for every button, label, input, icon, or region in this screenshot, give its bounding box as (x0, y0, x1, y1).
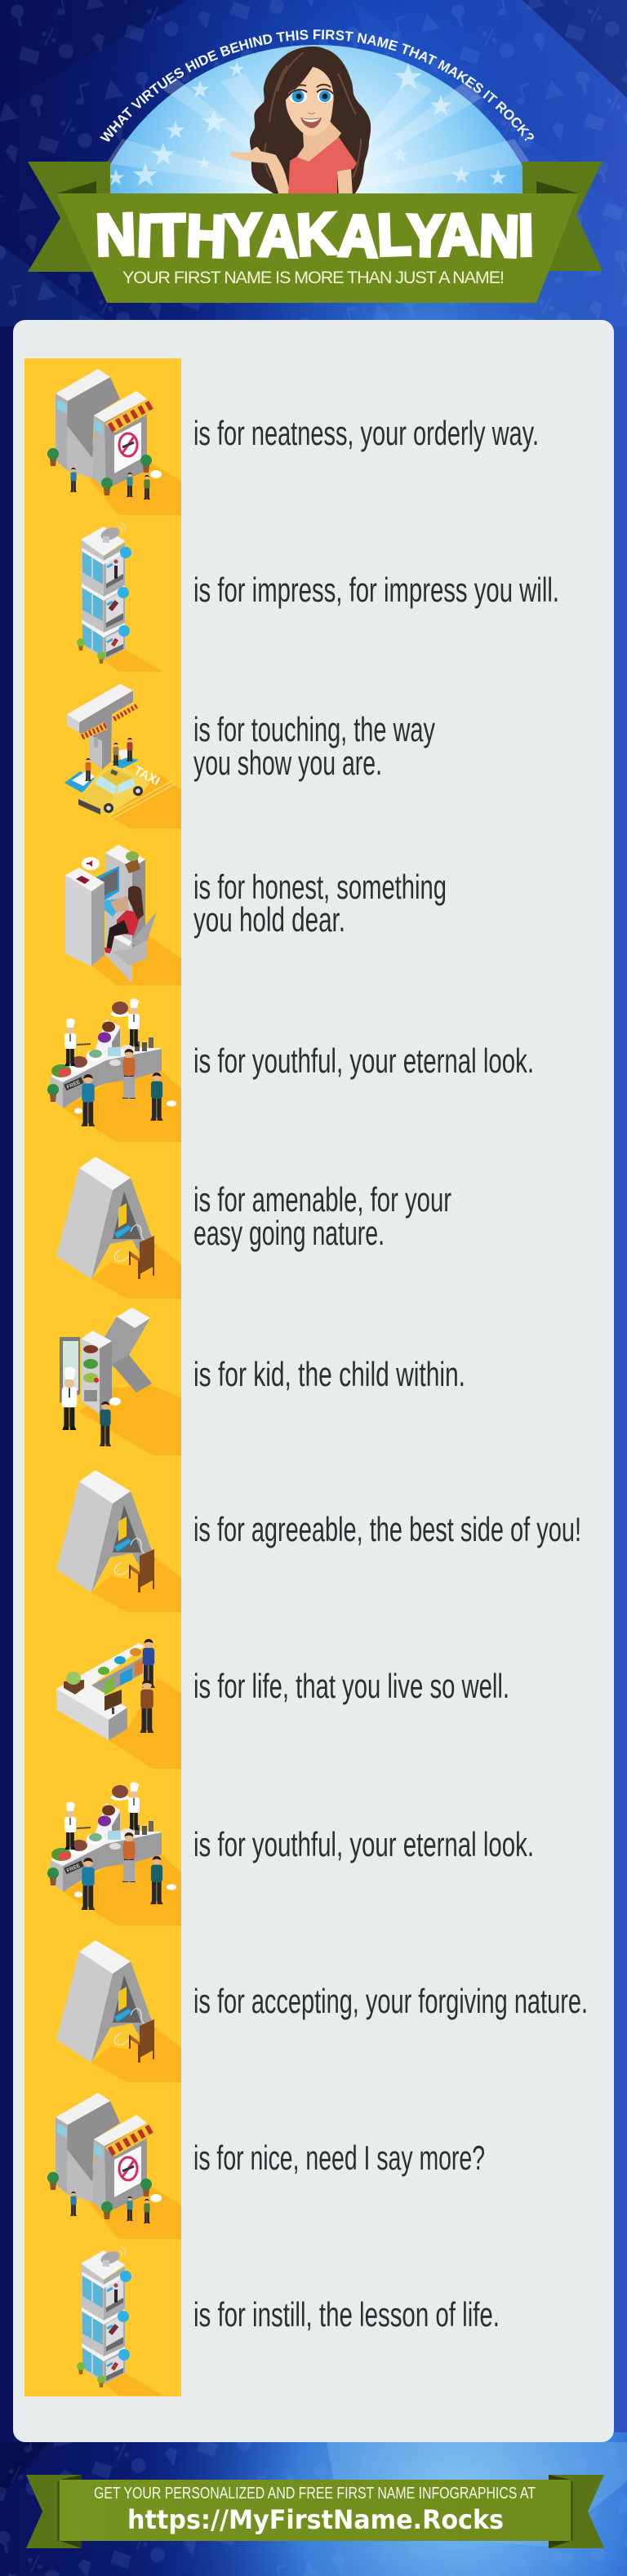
header ribbon (28, 162, 603, 303)
text: H (193, 868, 447, 939)
text: T (193, 710, 435, 782)
text: A: is for amenable, for your (193, 1180, 451, 1219)
illustration: letter A with chair (56, 1940, 181, 2082)
curved heading: WHAT VIRTUES HIDE BEHIND THIS FIRST NAME THAT MAKES IT ROCK? (100, 29, 534, 142)
illustration: letter Y buffet (47, 1782, 181, 1925)
illustration: letter Y buffet (47, 998, 181, 1142)
shirt (288, 137, 357, 196)
main panel (13, 320, 614, 2442)
face (286, 67, 334, 136)
name title: NITHYAKALYANI (95, 202, 534, 270)
row: I (77, 522, 559, 672)
text: T: you show you are. (193, 744, 382, 782)
illustration: letter N building (47, 2093, 181, 2239)
illustration: letter I tower (77, 2246, 163, 2396)
sunburst dome behind character (108, 45, 529, 193)
illustration: letter H desk (65, 845, 181, 985)
row: I (77, 2246, 500, 2396)
row: N (47, 2093, 485, 2239)
character illustration: cartoon woman (230, 47, 371, 196)
text: A (193, 1180, 451, 1252)
eyes (288, 88, 333, 104)
illustration: letter A with chair (56, 1470, 181, 1612)
footer url: https://MyFirstName.Rocks (127, 2504, 504, 2535)
right arm (337, 169, 353, 196)
smile (300, 118, 322, 128)
left arm and hand (230, 147, 291, 196)
row: Y (47, 998, 534, 1142)
text: H: you hold dear. (193, 900, 345, 939)
row: K (60, 1308, 465, 1455)
illustration: letter L counter (56, 1639, 181, 1769)
text: K: is for kid, the child within. (193, 1355, 465, 1393)
text: T: is for touching, the way (193, 710, 435, 748)
text: I: is for instill, the lesson of life. (193, 2295, 500, 2334)
decorative stars (108, 61, 506, 186)
text: A: easy going nature. (193, 1214, 385, 1252)
row: L (56, 1639, 509, 1769)
row: H (65, 845, 447, 985)
neck and chest (296, 121, 341, 163)
illustration: letter N building (47, 369, 181, 515)
illustration: letter I tower (77, 522, 163, 672)
footer ribbon (26, 2475, 604, 2548)
hair (250, 47, 371, 196)
illustration: letter A with chair (56, 1157, 181, 1299)
illustration: letter T taxi stand (64, 684, 181, 828)
row: A (56, 1157, 451, 1299)
illustration: letter K fridge (60, 1308, 181, 1455)
yellow illustration strip (24, 358, 181, 2396)
text: H: is for honest, something (193, 868, 447, 906)
row: N (47, 369, 539, 515)
text: N: is for nice, need I say more? (193, 2139, 485, 2177)
row: A (56, 1940, 588, 2082)
row: A (56, 1470, 581, 1612)
subtitle: YOUR FIRST NAME IS MORE THAN JUST A NAME! (122, 268, 505, 287)
row: T (64, 684, 435, 828)
row: Y (47, 1782, 534, 1925)
